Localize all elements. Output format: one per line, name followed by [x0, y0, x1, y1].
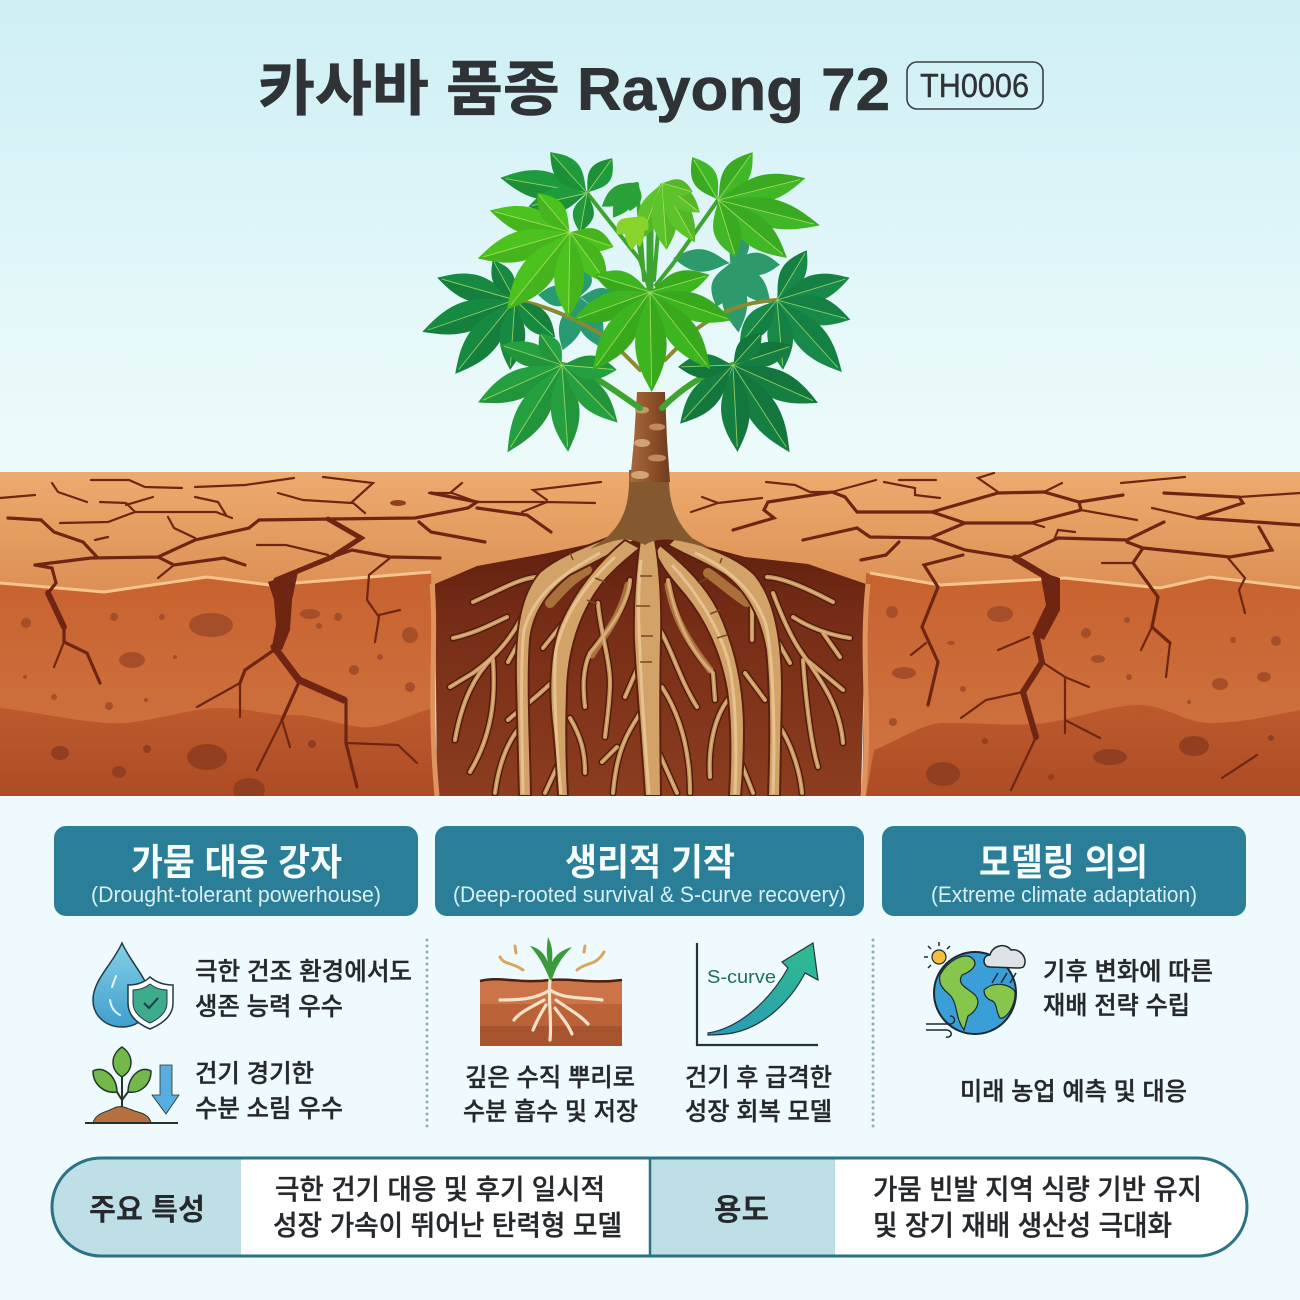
- text: climate strategy: [1043, 952, 1213, 1022]
- back leaf right: [672, 231, 780, 334]
- soil cracks medium: [8, 492, 1300, 787]
- pit right wall highlight: [863, 584, 868, 796]
- text: usage description: 및 장기 재배 생산성 극대화: [873, 1204, 1172, 1244]
- soil cross-section: [0, 472, 1300, 802]
- icon: deep root soil: [480, 937, 622, 1046]
- leaf center bright: [568, 263, 737, 392]
- leaf upper-left bright: [474, 185, 617, 320]
- back leaf left: [538, 264, 623, 354]
- icon: water drop with shield: [93, 943, 173, 1029]
- title: 카사바 품종 Rayong 72: [258, 56, 890, 123]
- leaf left dark: [417, 255, 563, 383]
- text: deep roots: 깊은 수직 뿌리로: [465, 1058, 635, 1094]
- icon: globe with weather: [924, 942, 1025, 1037]
- text: rapid recovery: 건기 후 급격한: [685, 1058, 832, 1094]
- text: key traits description: 극한 건기 대응 및 후기 일시적: [275, 1168, 605, 1208]
- young leaf light: [629, 175, 706, 251]
- stones left and right: [21, 606, 1281, 726]
- leaf upper left: [498, 144, 621, 234]
- label: key traits: 주요 특성: [89, 1185, 205, 1229]
- trunk: [590, 392, 712, 549]
- soil face right: [862, 573, 1300, 796]
- soil face left: [0, 574, 432, 728]
- soil surface: [0, 472, 1300, 602]
- cassava canopy: [417, 144, 854, 460]
- panel: header physiology: (Deep-rooted survival & S-curve recovery): [453, 882, 846, 907]
- text: climate strategy: 재배 전략 수립: [1043, 986, 1190, 1022]
- text: drought survival: [195, 952, 412, 1023]
- chart: S-curve icon: [697, 943, 818, 1045]
- text: rapid recovery: 성장 회복 모델: [685, 1092, 832, 1128]
- panel: header drought: (Drought-tolerant powerhouse): [91, 882, 381, 907]
- text: deep roots: [463, 1058, 638, 1128]
- pit left wall highlight: [432, 584, 437, 796]
- text: future agriculture: 미래 농업 예측 및 대응: [960, 1072, 1187, 1108]
- panel: header physiology: 생리적 기작: [565, 832, 735, 886]
- main roots: [516, 533, 782, 796]
- icon: seedling with down arrow: [85, 1047, 179, 1123]
- soil lower layer left: [0, 708, 437, 796]
- leaf right dark: [731, 244, 854, 382]
- wide crack wedges: [268, 572, 298, 650]
- text: water conservation: 수분 소림 우수: [195, 1089, 343, 1125]
- text: usage description: [873, 1168, 1202, 1244]
- pit behind roots: [435, 537, 866, 796]
- panel: bottom summary bar: [52, 1158, 1247, 1256]
- main root bark ticks: [570, 553, 727, 662]
- badge: TH0006: [907, 62, 1043, 109]
- text: water conservation: 건기 경기한: [195, 1054, 314, 1090]
- panel: header modeling: 모델링 의의: [979, 832, 1148, 886]
- young leaf bright: [611, 211, 653, 250]
- text: drought survival: 극한 건조 환경에서도: [195, 952, 412, 988]
- panel: header modeling: [882, 826, 1246, 916]
- panel: header drought: 가뭄 대응 강자: [131, 832, 342, 886]
- background lower panel: [0, 796, 1300, 1300]
- text: water conservation: [195, 1054, 343, 1125]
- brown branches: [515, 300, 777, 370]
- soil lower layer right: [866, 705, 1300, 796]
- text: rapid recovery: [685, 1058, 832, 1128]
- text: usage description: 가뭄 빈발 지역 식량 기반 유지: [873, 1168, 1202, 1208]
- secondary root highlights: [450, 577, 850, 793]
- text: deep roots: 수분 흡수 및 저장: [463, 1092, 638, 1128]
- leaf lower left: [472, 327, 627, 460]
- secondary roots: [450, 577, 850, 793]
- text: key traits description: [273, 1168, 622, 1244]
- secondary thick roots: [550, 570, 747, 670]
- roots: [450, 533, 850, 796]
- text: climate strategy: 기후 변화에 따른: [1043, 952, 1213, 988]
- main root highlights: [522, 553, 774, 794]
- chart: S-curve icon: S-curve: [707, 967, 776, 987]
- leaf upper right: [682, 145, 823, 269]
- green stems: [562, 184, 733, 408]
- panel: header modeling: (Extreme climate adaptation): [931, 882, 1197, 907]
- background sky: [0, 0, 1300, 472]
- soil cracks thin: [0, 473, 1300, 790]
- soil cracks wide: [48, 519, 1052, 737]
- label: usage: 용도: [714, 1185, 769, 1229]
- text: drought survival: 생존 능력 우수: [195, 987, 343, 1023]
- badge: TH0006: TH0006: [920, 67, 1029, 104]
- young leaf dark: [597, 175, 645, 223]
- panel: header physiology: [435, 826, 864, 916]
- leaf lower right: [670, 326, 824, 460]
- panel: header drought: [54, 826, 418, 916]
- text: key traits description: 성장 가속이 뛰어난 탄력형 모델: [273, 1204, 622, 1244]
- root shadows: [450, 577, 850, 793]
